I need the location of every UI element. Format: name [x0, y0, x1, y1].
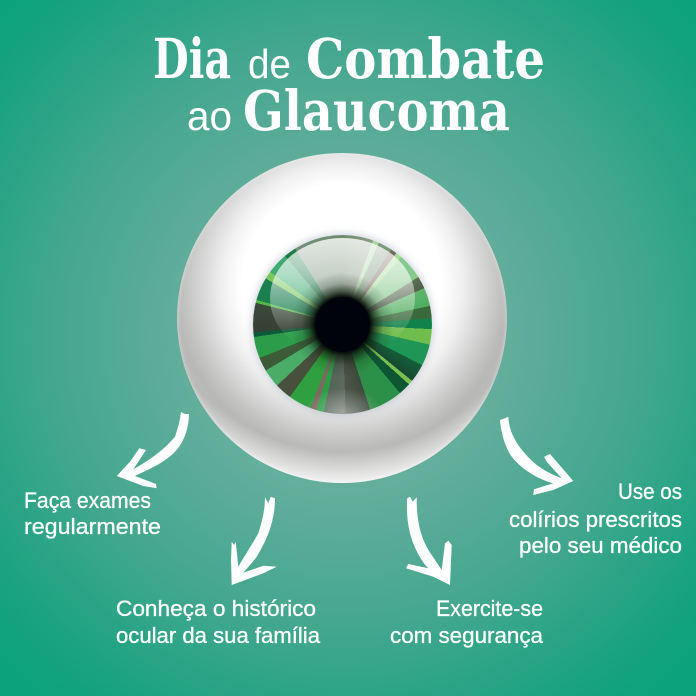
arrow: family history: [231, 497, 277, 585]
label: eye drops: Use os: [618, 479, 682, 504]
glass highlight: [270, 238, 415, 358]
label: eye drops: colírios prescritos: [509, 507, 682, 532]
title: Combate: [306, 26, 545, 91]
label: family history: Conheça o histórico: [116, 596, 316, 621]
label: eye drops: pelo seu médico: [519, 533, 682, 558]
arrow: exams: [117, 412, 189, 488]
label: exams: [24, 488, 161, 539]
label: exercise: [390, 596, 544, 648]
title: Glaucoma: [243, 78, 510, 143]
label: eye drops: [509, 479, 682, 558]
title: [153, 26, 545, 143]
label: family history: [116, 596, 321, 648]
label: family history: ocular da sua família: [116, 623, 321, 648]
title: ao: [187, 93, 232, 139]
green iris: [253, 235, 432, 414]
label: exercise: com segurança: [390, 623, 544, 648]
eyeball: [177, 153, 507, 483]
label: exams: regularmente: [24, 514, 161, 539]
iris dark inner shading: [253, 235, 432, 414]
white sclera sphere: [177, 153, 507, 483]
label: exams: Faça exames: [24, 488, 151, 513]
lower reflection: [303, 380, 383, 414]
label: exercise: Exercite-se: [436, 596, 543, 621]
arrow: exercise: [406, 497, 452, 585]
title: Dia: [153, 26, 231, 91]
pupil: [315, 297, 370, 352]
arrow: eye drops: [500, 417, 573, 495]
title: de: [248, 41, 291, 87]
